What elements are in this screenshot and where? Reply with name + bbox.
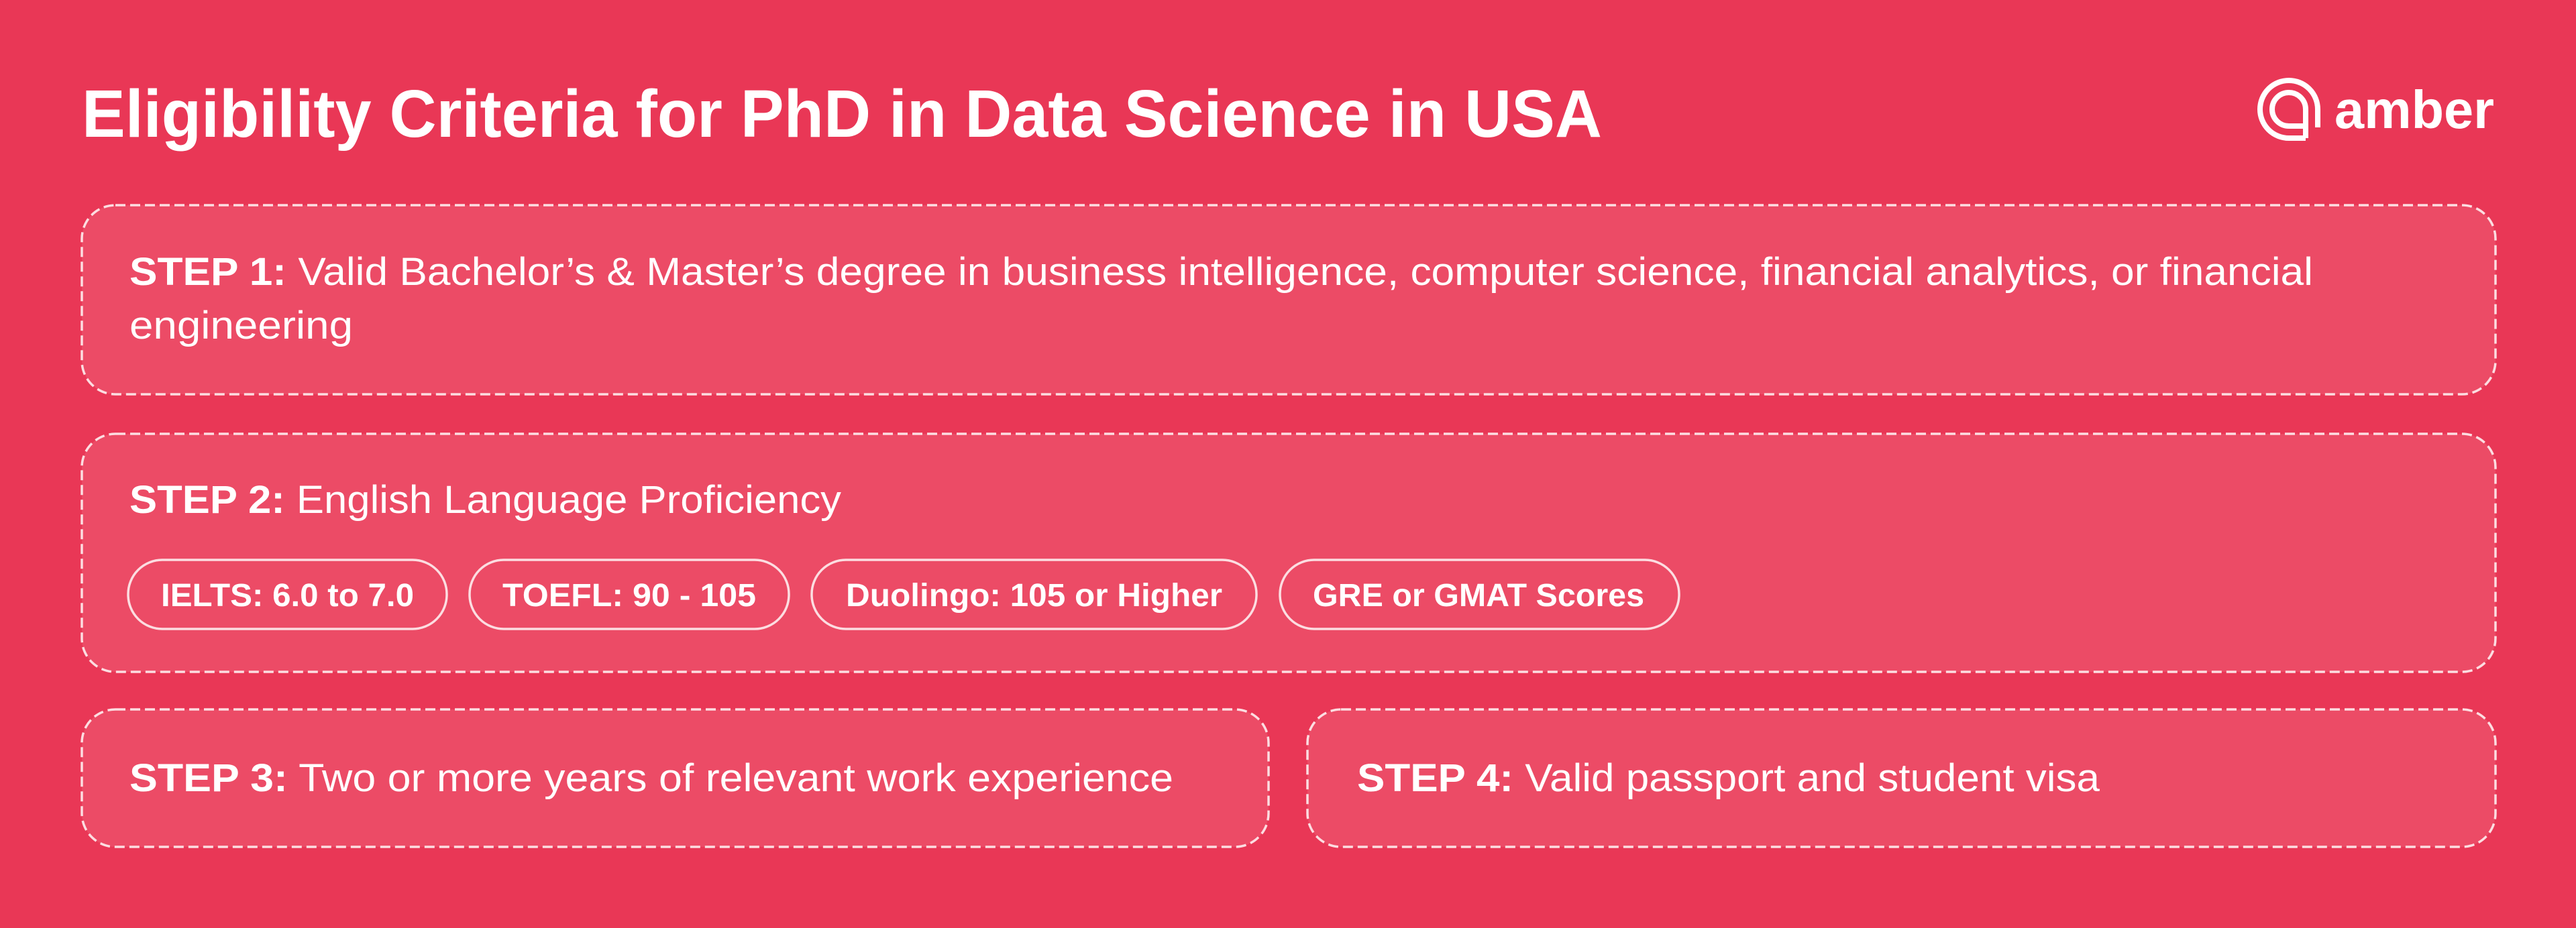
panel: step 1: STEP 1: Valid Bachelor’s & Master’s degree in business intelligence, computer science, financial analytics, or financial (129, 250, 2313, 294)
pill: Duolingo (812, 560, 1256, 629)
title: Eligibility Criteria for PhD in Data Science in USA (82, 76, 1602, 152)
logo: amber: amber (2334, 80, 2494, 139)
pill: IELTS (128, 560, 447, 629)
panel: step 1 (82, 205, 2496, 394)
pill: IELTS: IELTS: 6.0 to 7.0 (161, 578, 414, 614)
panel: step 2: STEP 2: English Language Proficiency (129, 478, 841, 522)
panel: step 1: engineering (129, 304, 353, 347)
logo: amber (2260, 80, 2494, 139)
panel: step 4: STEP 4: Valid passport and student visa (1357, 756, 2100, 800)
panel: step 3 (82, 709, 1269, 847)
pill: GRE: GRE or GMAT Scores (1313, 578, 1644, 614)
panel: step 3: STEP 3: Two or more years of relevant work experience (129, 756, 1173, 800)
pill: TOEFL: TOEFL: 90 - 105 (502, 578, 756, 614)
pill: TOEFL (470, 560, 789, 629)
panel: step 2 (82, 434, 2496, 672)
panel: step 4 (1307, 709, 2496, 847)
pill: GRE (1280, 560, 1679, 629)
pill: Duolingo: Duolingo: 105 or Higher (846, 578, 1222, 614)
